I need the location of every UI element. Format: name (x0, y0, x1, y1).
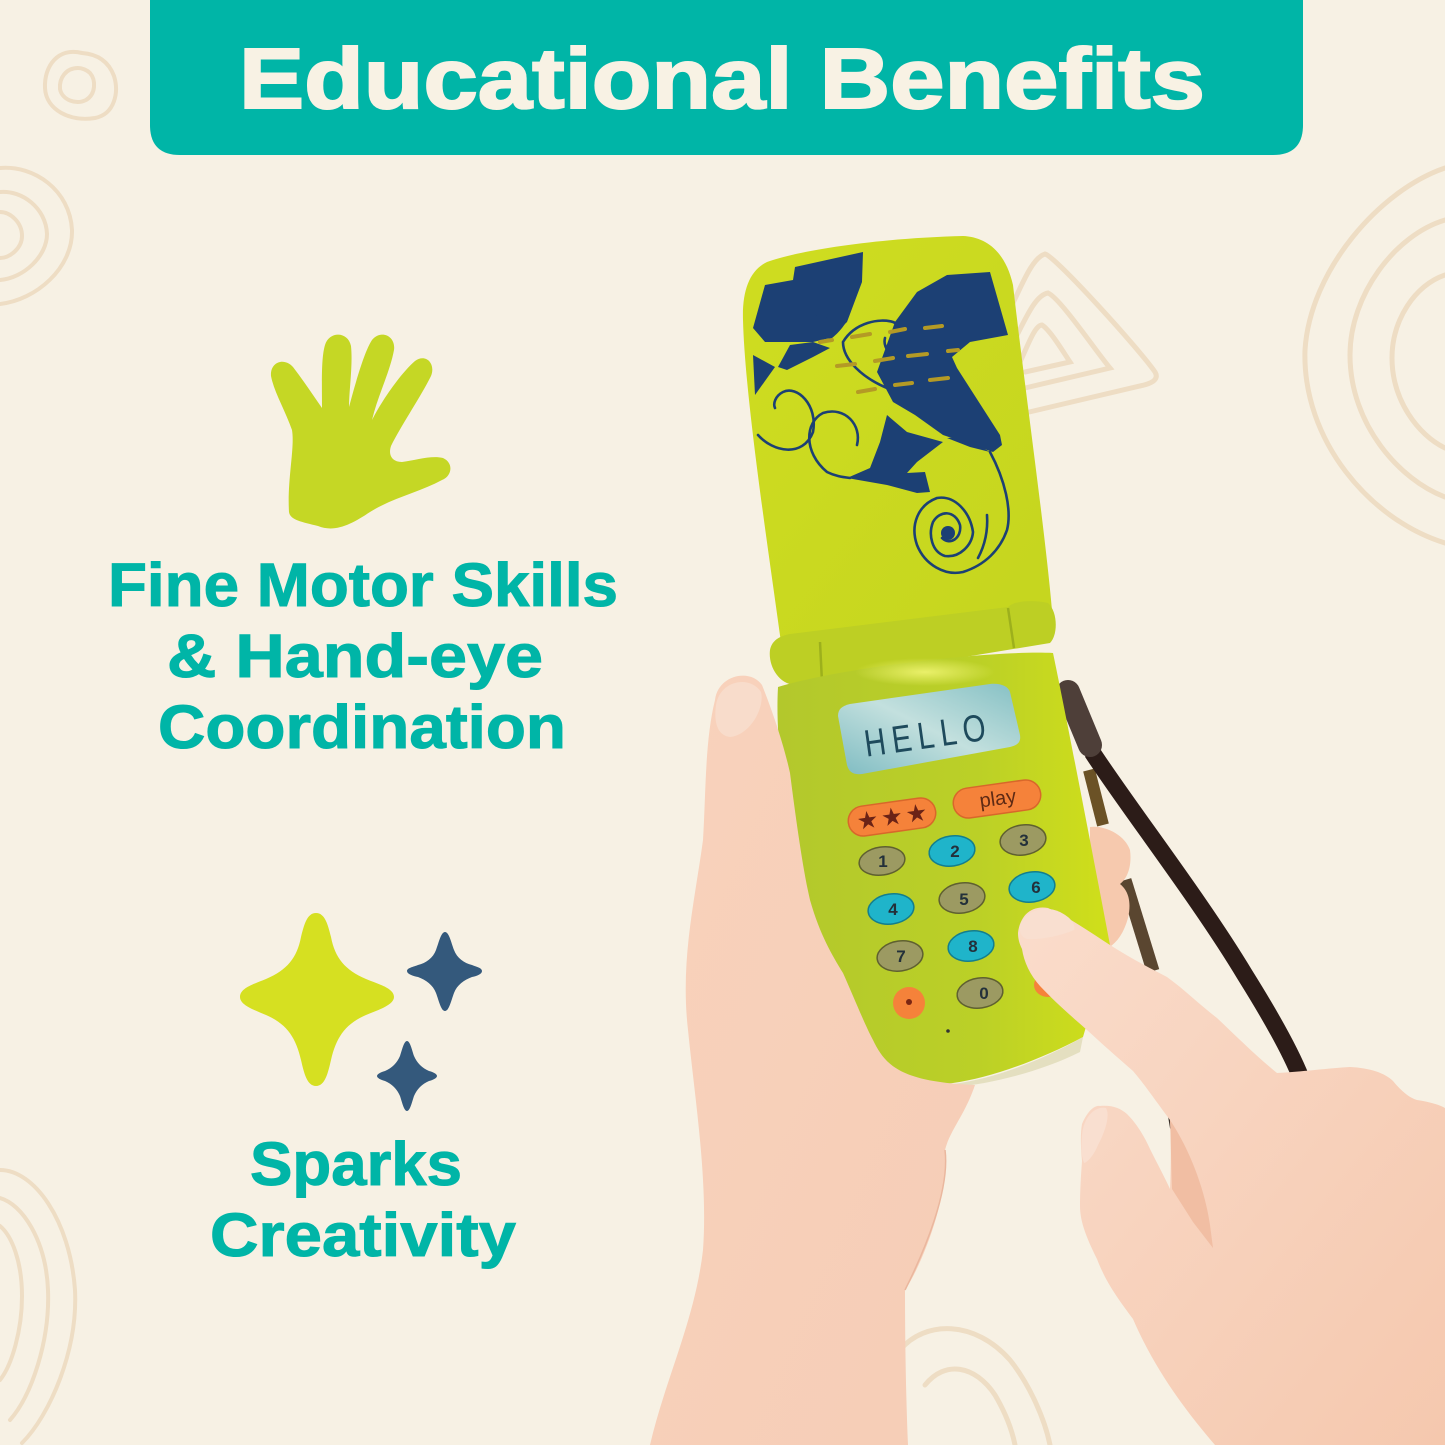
keypad: 7 (896, 947, 906, 966)
keypad: 5 (959, 890, 969, 909)
keypad: 6 (1031, 878, 1041, 897)
hinge (770, 601, 1056, 685)
left hand (650, 676, 975, 1445)
heading: fine motor skills (108, 551, 618, 761)
icon: sparkles (240, 913, 482, 1111)
thumb web crease (1170, 1120, 1213, 1248)
thumbnail (1081, 1108, 1108, 1163)
keypad: 2 (950, 842, 960, 861)
screen glow (855, 658, 995, 686)
star button (846, 796, 938, 838)
keypad: 1 (878, 852, 888, 871)
play button (951, 778, 1043, 820)
heading: sparks creativity: Creativity (210, 1201, 516, 1269)
left hand back fingers (1090, 827, 1131, 948)
play button: play (978, 786, 1018, 812)
title banner (150, 0, 1303, 155)
phone base (777, 653, 1110, 1085)
phone strap (1068, 692, 1301, 1128)
screen: HELLO (862, 706, 995, 766)
speaker slots (820, 326, 958, 392)
keypad: 0 (979, 984, 989, 1003)
heading: sparks creativity: Sparks (250, 1130, 462, 1198)
index fingernail (1020, 909, 1074, 939)
phone (743, 236, 1110, 1087)
title: Educational Benefits (239, 32, 1205, 127)
keypad: 8 (968, 937, 978, 956)
right hand with pointing finger (1018, 907, 1445, 1445)
phone lid (743, 236, 1056, 685)
heading: fine motor skills: Coordination (158, 693, 566, 761)
left thumbnail (715, 682, 762, 737)
heading: fine motor skills: & Hand-eye (167, 622, 543, 690)
star button: ★ ★ ★ (857, 801, 928, 834)
keypad: 3 (1019, 831, 1029, 850)
icon: hand (271, 335, 450, 528)
lid chameleon print (753, 252, 1008, 540)
heading: sparks creativity (210, 1130, 516, 1269)
screen (838, 684, 1020, 774)
keypad (857, 822, 1062, 1033)
heading: fine motor skills: Fine Motor Skills (108, 551, 618, 619)
keypad: 4 (888, 900, 898, 919)
